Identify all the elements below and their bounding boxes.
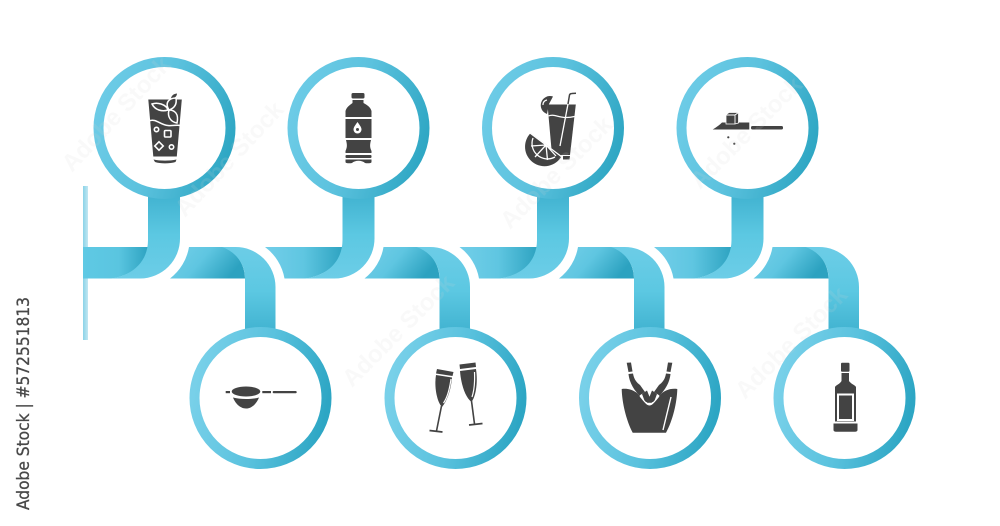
stock id caption: Adobe Stock | #572551813 (14, 297, 34, 510)
watermark: Adobe Stock (495, 111, 618, 234)
icon: iced drink glass (148, 94, 182, 163)
icon: sugar cube on spoon (713, 112, 783, 145)
watermark: Adobe Stock (170, 96, 290, 222)
ring: strainer (194, 332, 326, 464)
connector ribbon 1 (top) (83, 192, 180, 279)
icon: champagne flutes (430, 362, 482, 432)
ring: water bottle (292, 62, 424, 194)
ring: liquor bottle (778, 332, 910, 464)
watermark: Adobe Stock (57, 51, 177, 177)
icon: liquor bottle (834, 363, 858, 432)
icon: cocktail with citrus slice (525, 93, 576, 166)
watermark: Adobe Stock (685, 71, 808, 194)
connector ribbon 2 (down) (170, 247, 276, 335)
connector ribbon 6 (down) (559, 247, 664, 335)
icon: water bottle (346, 93, 372, 163)
watermark (57, 51, 853, 404)
icon: tea strainer (226, 386, 297, 408)
connector ribbon 4 (down) (364, 247, 470, 335)
ring: sugar cube spoon (682, 62, 814, 194)
connector ribbon 7 (top) (654, 192, 764, 279)
ring: ice bucket (584, 332, 716, 464)
connector ribbon 5 (top) (460, 192, 569, 279)
ring: iced drink (98, 62, 230, 194)
connector ribbon 3 (top) (265, 192, 375, 279)
ring: champagne flutes (390, 332, 522, 464)
icon: champagne ice bucket (622, 362, 677, 433)
watermark: Adobe Stock (730, 281, 853, 404)
ring: cocktail (487, 62, 619, 194)
connector ribbon 8 (down) (754, 247, 859, 335)
vertical start bar (83, 186, 88, 340)
watermark: Adobe Stock (337, 269, 460, 392)
